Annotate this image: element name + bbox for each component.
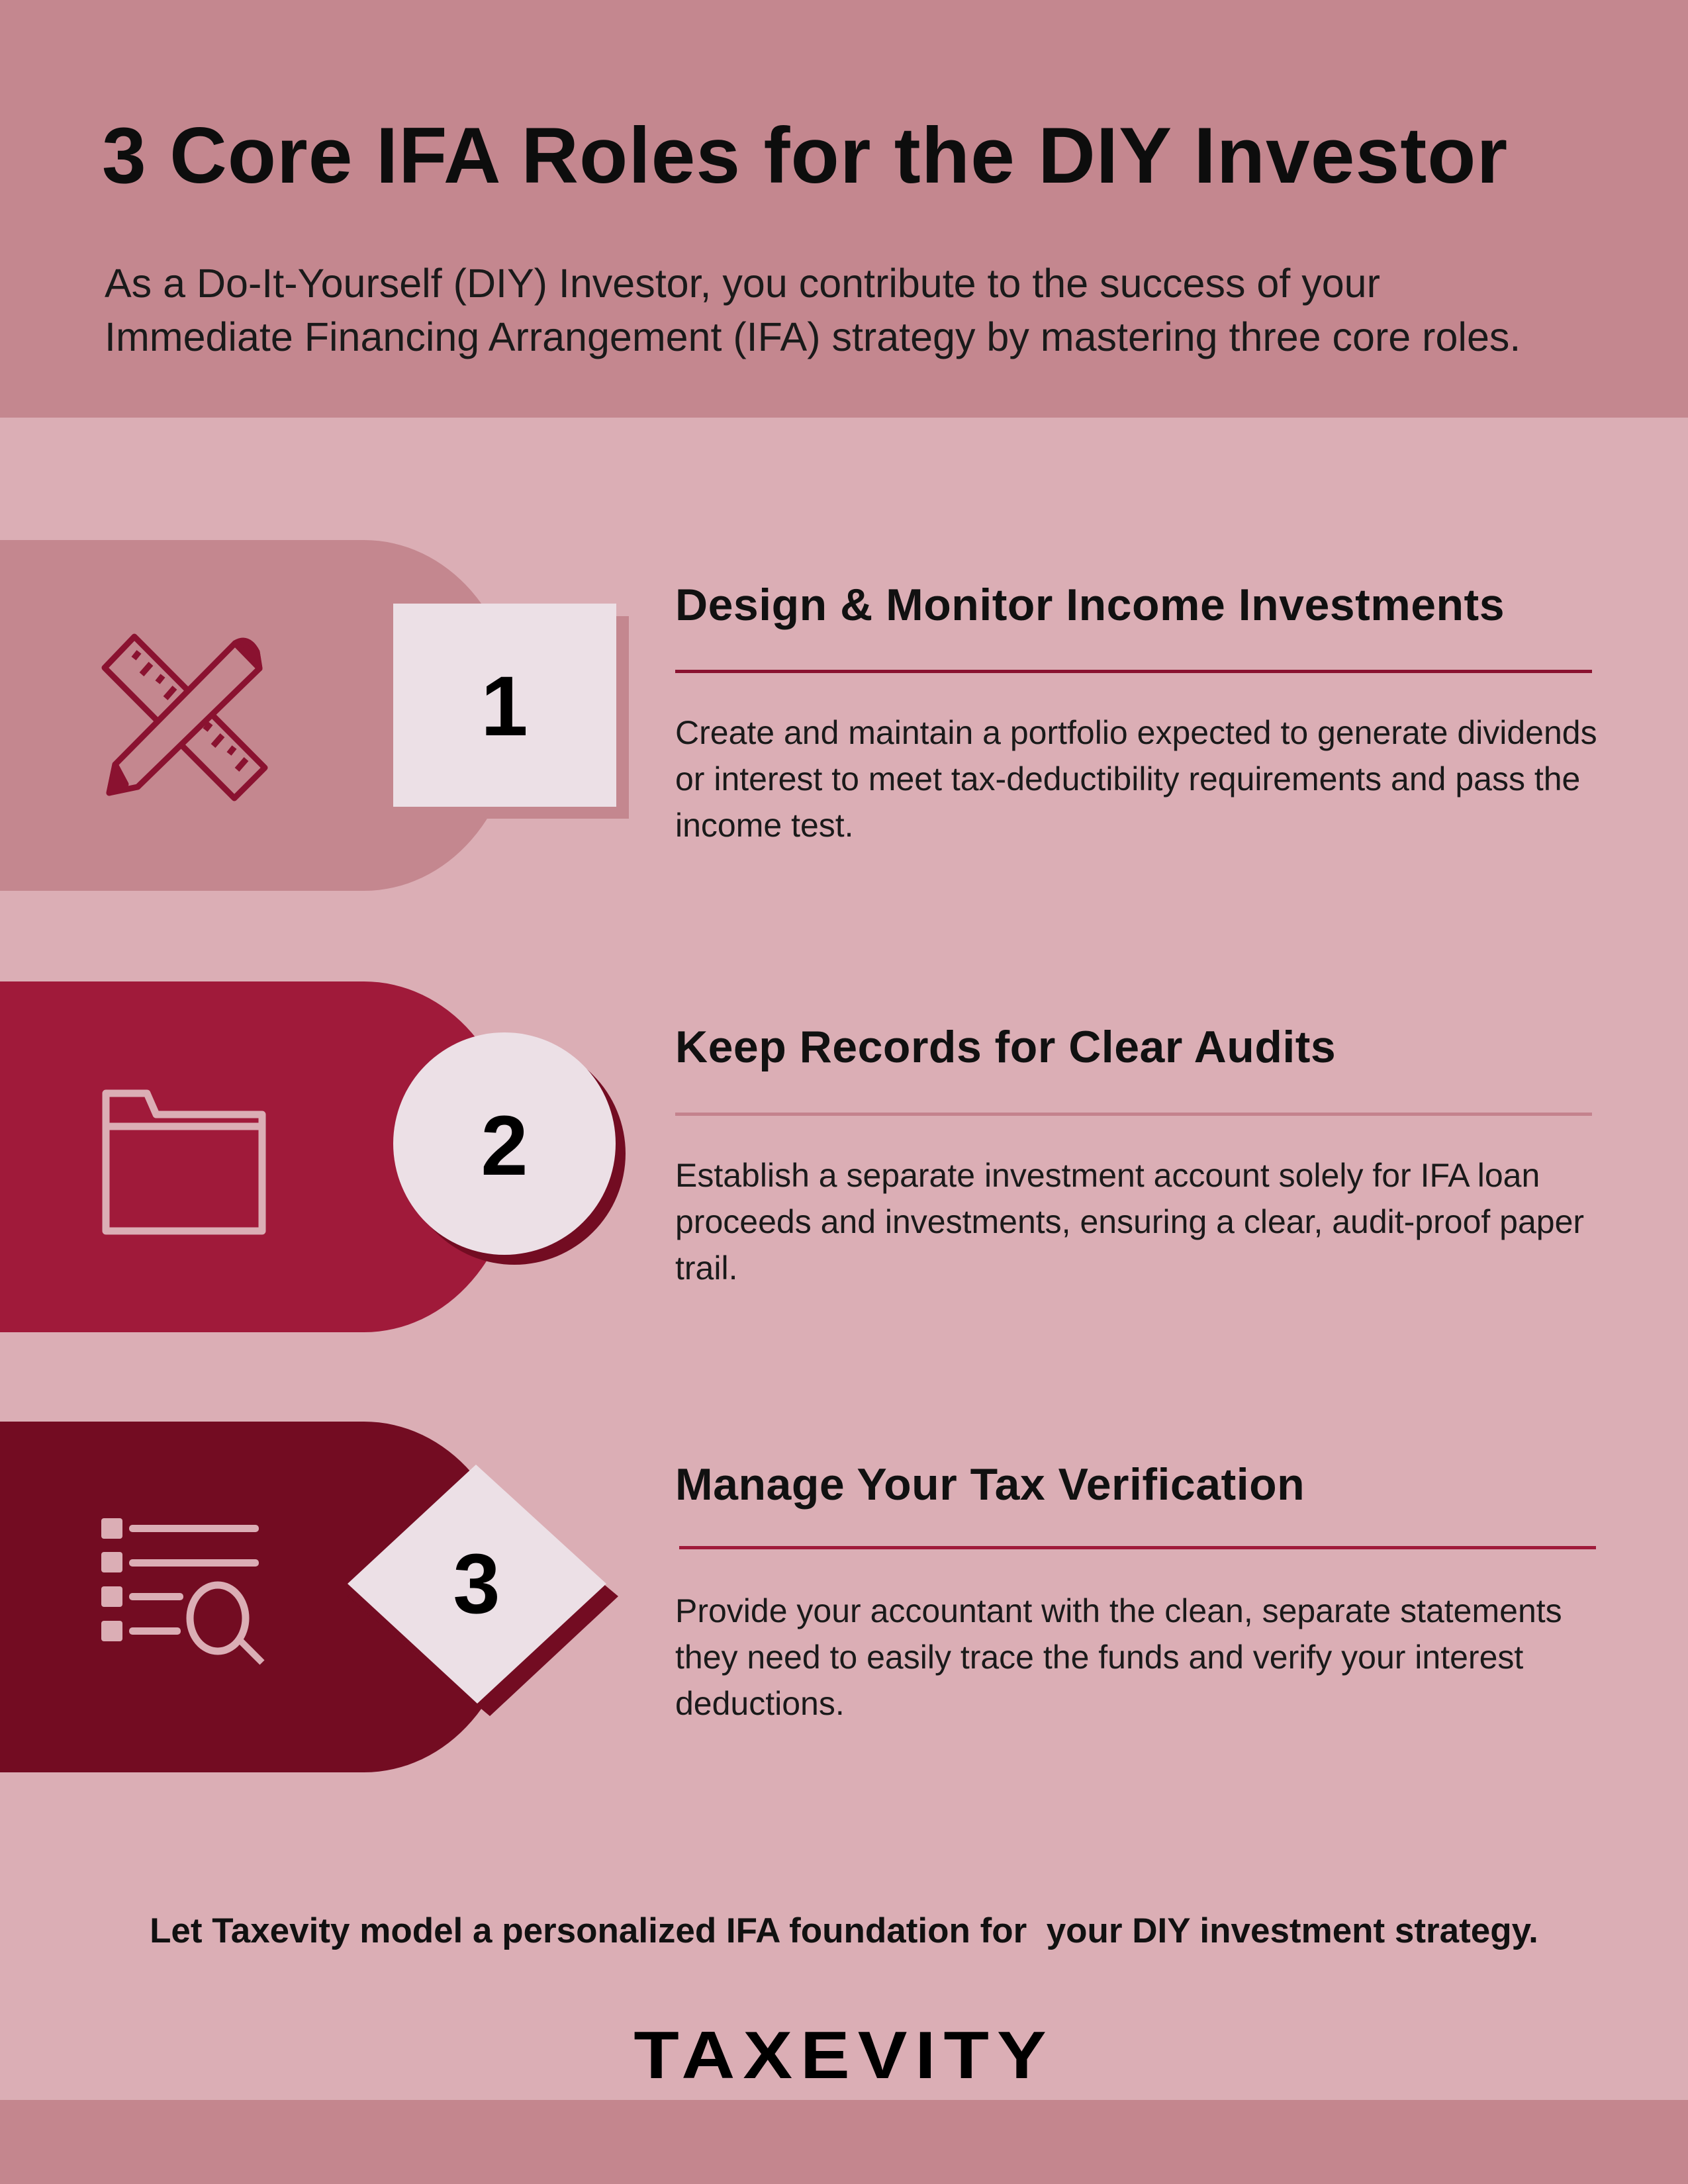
panel 2 shape bbox=[0, 981, 626, 1332]
logo: TAXEVITY bbox=[633, 2018, 1055, 2093]
body 2: Establish a separate investment account solely for IFA loan proceeds and investments, ensuring a clear, audit-proof paper trail. bbox=[675, 1157, 1584, 1287]
numbers: 2 bbox=[481, 1099, 528, 1193]
heading 2: Keep Records for Clear Audits bbox=[675, 1022, 1336, 1072]
heading 3: Manage Your Tax Verification bbox=[675, 1459, 1305, 1510]
heading 1: Design & Monitor Income Investments bbox=[675, 580, 1505, 630]
call to action: Let Taxevity model a personalized IFA foundation for your DIY investment strategy. bbox=[150, 1911, 1538, 1950]
subtitle bbox=[105, 261, 1521, 359]
body 1: Create and maintain a portfolio expected to generate dividends or interest to meet tax-deductibility requirements and pass the income test. bbox=[675, 714, 1597, 844]
footer band bbox=[0, 2100, 1688, 2184]
panel 1 shape bbox=[0, 540, 629, 891]
header band bbox=[0, 0, 1688, 418]
icon: ruler and pencil bbox=[105, 637, 265, 798]
icon: list with magnifier bbox=[101, 1518, 262, 1662]
numbers bbox=[453, 659, 528, 1631]
subtitle: As a Do-It-Yourself (DIY) Investor, you contribute to the success of your bbox=[105, 261, 1380, 306]
body 3: Provide your accountant with the clean, separate statements they need to easily trace the funds and verify your interest deductions. bbox=[675, 1592, 1562, 1722]
numbers: 3 bbox=[453, 1537, 500, 1631]
title: 3 Core IFA Roles for the DIY Investor bbox=[102, 111, 1508, 200]
panel 3 shape bbox=[0, 1422, 618, 1772]
numbers: 1 bbox=[481, 659, 528, 754]
subtitle: Immediate Financing Arrangement (IFA) strategy by mastering three core roles. bbox=[105, 314, 1521, 359]
icon: folder bbox=[106, 1093, 262, 1231]
